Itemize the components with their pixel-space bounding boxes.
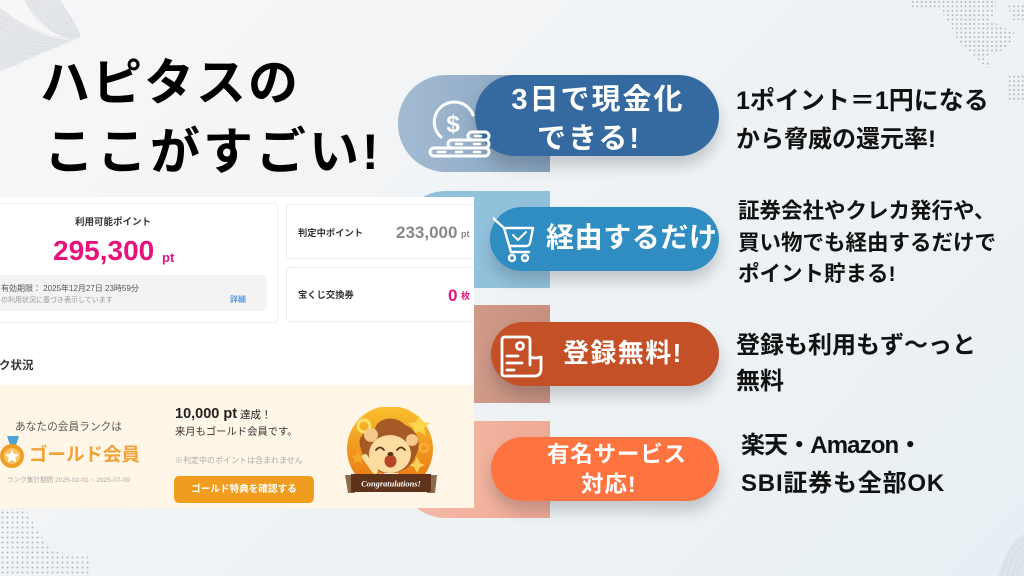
card: 判定中ポイント: 判定中ポイント: [298, 228, 363, 238]
title: [40, 55, 382, 180]
card: 宝くじ交換券: [286, 267, 486, 322]
panel: member rank: ※判定中のポイントは含まれません: [175, 456, 303, 465]
pill: 有名サービス対応: 有名サービス: [547, 442, 687, 467]
heading: ランク状況: ク状況: [0, 360, 34, 372]
pill: 登録無料: [491, 322, 719, 386]
pill: 経由するだけ: [490, 207, 719, 271]
text: 対応サービス: [741, 432, 945, 497]
text: 還元率: から脅威の還元率!: [736, 126, 936, 153]
button: ゴールド特典: [174, 476, 314, 503]
card: 利用可能ポイント: 295,300: [53, 235, 154, 266]
text: 登録の説明: [736, 332, 976, 395]
note box: 有効期限: [0, 275, 267, 311]
text: 経由の説明: ポイント貯まる!: [738, 262, 896, 286]
panel: member rank: あなたの会員ランクは: [15, 421, 122, 433]
pill: 3日で現金化できる: できる!: [537, 123, 641, 155]
card: 宝くじ交換券: 枚: [461, 291, 470, 301]
pill: 有名サービス対応: [491, 437, 719, 501]
text: 経由の説明: [738, 199, 996, 286]
panel: 有名サービス対応: [416, 421, 945, 518]
panel: screenshot of point dashboard: [0, 197, 474, 508]
icon: coins: $: [446, 111, 460, 138]
pill: 3日で現金化できる: 3日で現金化: [511, 84, 685, 116]
card: 利用可能ポイント: pt: [162, 250, 174, 265]
panel: 経由するだけ: [423, 191, 996, 288]
icon: coins: [428, 100, 490, 158]
panel: 3日で現金化: [398, 75, 989, 172]
text: 還元率: [736, 87, 989, 153]
badge: lion congratulations: Congratulations!: [361, 480, 421, 488]
pill: 経由するだけ: 経由するだけ: [546, 222, 718, 253]
button: ゴールド特典: ゴールド特典を確認する: [191, 484, 297, 495]
icon: shopping cart: [493, 217, 534, 262]
text: 対応サービス: 楽天・Amazon・: [741, 432, 921, 459]
card: 判定中ポイント: 233,000: [396, 223, 457, 242]
text: 登録の説明: 登録も利用もず～っと: [736, 332, 976, 359]
badge: lion congratulations: [345, 407, 437, 493]
panel: member rank: ゴールド会員: [29, 444, 140, 465]
text: 対応サービス: SBI証券も全部OK: [741, 470, 945, 497]
text: 還元率: 1ポイント＝1円になる: [736, 87, 989, 115]
card: 判定中ポイント: [286, 204, 486, 259]
card: 宝くじ交換券: 宝くじ交換券: [298, 290, 354, 300]
panel: member rank: ランク集計期間 2025-02-01 ~ 2025-07-09: [7, 477, 130, 484]
pill: 登録無料: 登録無料!: [563, 338, 683, 368]
panel: 登録無料: [474, 305, 976, 403]
title: ここがすごい!: [44, 124, 382, 180]
note box: 有効期限: 有効期限： 2025年12月27日 23時59分: [1, 284, 139, 293]
panel: member rank: 10,000 pt 達成！: [175, 406, 272, 422]
text: 経由の説明: 買い物でも経由するだけで: [738, 231, 996, 255]
pill: 有名サービス対応: 対応!: [581, 472, 636, 497]
title: ハピタスの: [40, 55, 300, 111]
icon: medal: [0, 436, 24, 468]
panel: member rank: [0, 385, 474, 508]
card: 利用可能ポイント: [0, 203, 278, 323]
text: 登録の説明: 無料: [736, 368, 784, 395]
note box: 有効期限: 詳細: [230, 295, 246, 304]
card: 利用可能ポイント: 利用可能ポイント: [75, 217, 151, 228]
card: 宝くじ交換券: 0: [448, 286, 457, 305]
panel: member rank: 来月もゴールド会員です。: [175, 427, 298, 438]
card: 判定中ポイント: pt: [461, 229, 470, 239]
pill: 3日で現金化できる: [475, 75, 719, 156]
note box: 有効期限: の利用状況に基づき表示しています: [1, 297, 113, 304]
icon: document: [500, 336, 542, 378]
text: 経由の説明: 証券会社やクレカ発行や、: [738, 199, 995, 223]
